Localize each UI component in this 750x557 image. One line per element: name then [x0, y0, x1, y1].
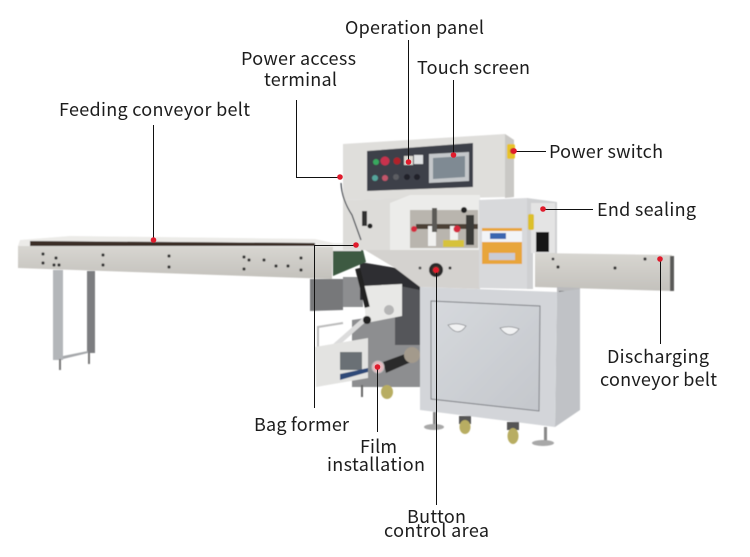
callout: feeding conveyor belt: [151, 125, 156, 243]
film roll shaft: [372, 347, 420, 373]
label: Power switch: Power switch: [549, 138, 663, 164]
callout: power switch: [511, 148, 546, 154]
callout: touch screen: [451, 80, 456, 158]
callout: button control area: [433, 267, 439, 505]
callout: film installation: [375, 364, 380, 432]
label: Discharging conveyor belt: [600, 343, 717, 392]
label: Touch screen: Touch screen: [417, 54, 530, 80]
callout: discharging conveyor belt: [657, 256, 663, 344]
end sealing housing: [479, 198, 557, 289]
label: Power access terminal: terminal: [264, 66, 337, 92]
power switch: [507, 144, 516, 159]
feeding conveyor belt: [18, 236, 333, 279]
callout: bag former: [314, 242, 359, 408]
callout: power access terminal: [296, 100, 343, 180]
label: Discharging conveyor belt: Discharging: [607, 343, 709, 369]
touch screen: [429, 152, 469, 183]
label: Film installation: Film: [360, 433, 397, 459]
label: Power access terminal: [241, 45, 356, 92]
bag former assembly: [315, 243, 402, 399]
label: Discharging conveyor belt: conveyor belt: [600, 366, 717, 392]
main frame beam: [365, 250, 480, 289]
cabinet: [420, 287, 580, 427]
sealing unit: [390, 195, 480, 250]
label: Bag former: Bag former: [254, 411, 350, 437]
callout: end sealing: [540, 206, 593, 212]
feeding conveyor legs: [53, 270, 95, 370]
label: Button control area: [384, 503, 489, 543]
callout lines and markers: [151, 40, 663, 505]
label: Film installation: [327, 433, 425, 477]
callout: operation panel: [406, 40, 411, 165]
label: Film installation: installation: [327, 451, 425, 477]
discharging conveyor belt: [535, 253, 674, 340]
label: End sealing: End sealing: [597, 196, 696, 222]
operation panel: [367, 143, 473, 191]
label: Button control area: control area: [384, 517, 489, 543]
control box: [341, 134, 516, 250]
label: Power access terminal: Power access: [241, 45, 356, 71]
rear frame under feeding conveyor: [310, 262, 420, 387]
cabinet feet and casters: [424, 412, 554, 446]
machine photo: [18, 134, 674, 446]
label: Feeding conveyor belt: Feeding conveyor belt: [59, 96, 250, 122]
label plate: [482, 228, 522, 264]
label: Operation panel: Operation panel: [345, 14, 484, 40]
label: Button control area: Button: [407, 503, 466, 529]
